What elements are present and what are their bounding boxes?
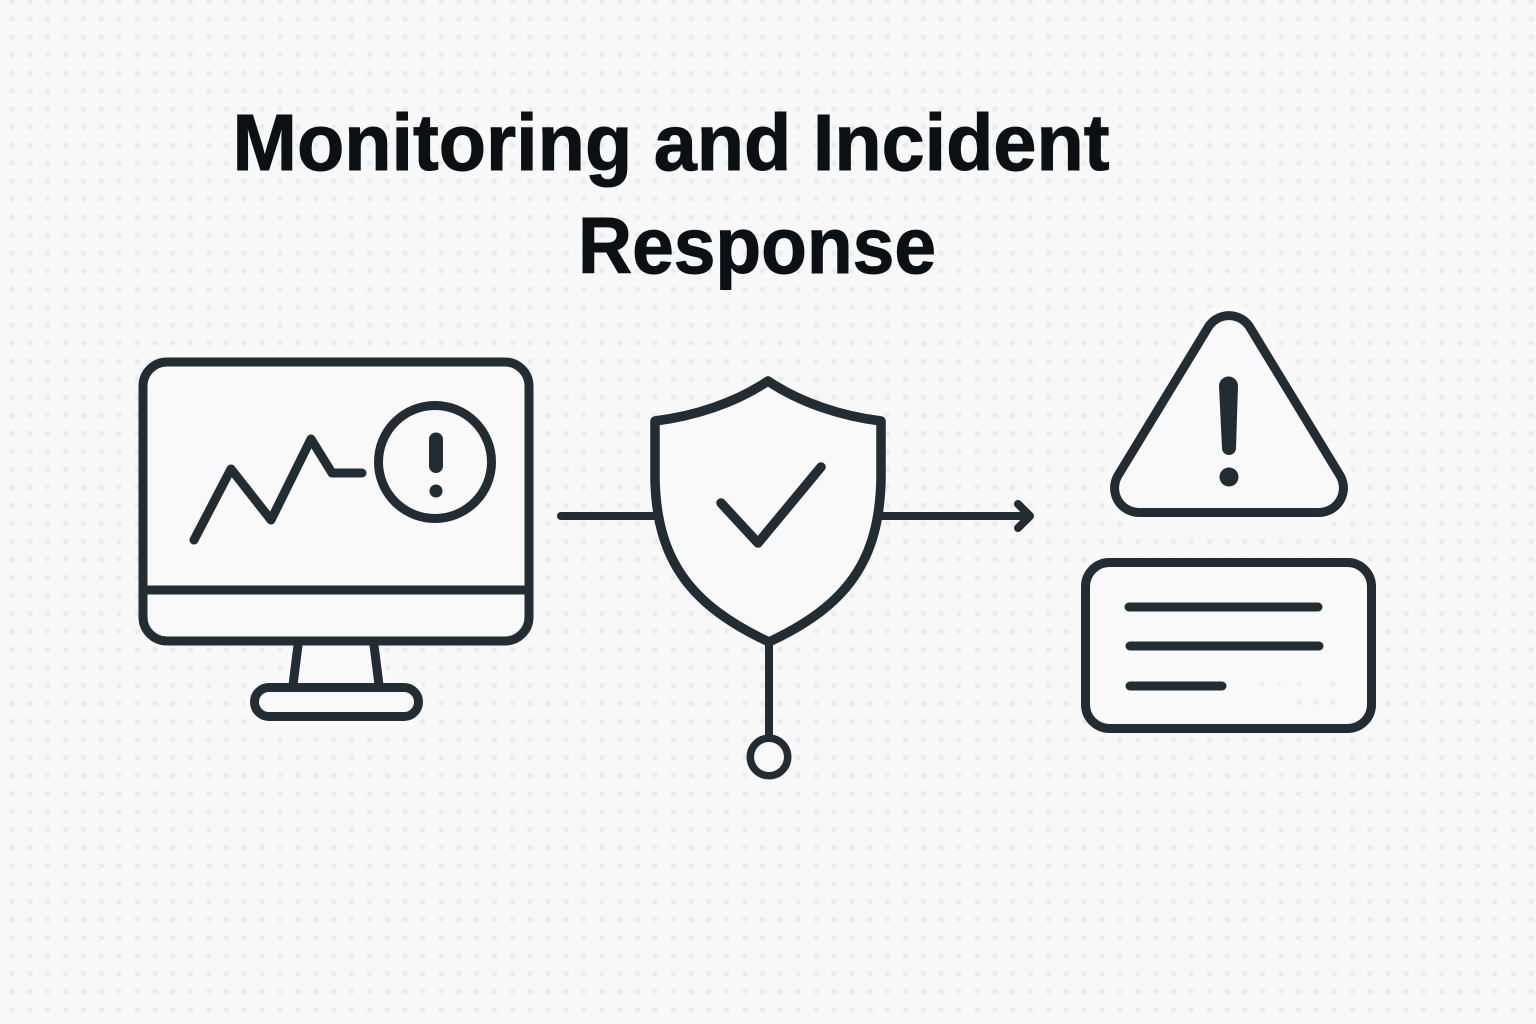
icon: shield with check: [655, 381, 881, 642]
check mark: [721, 467, 821, 543]
alert exclamation mark: [430, 440, 442, 498]
title: [232, 98, 1110, 290]
monitor chin divider: [143, 586, 529, 594]
monitor screen frame: [143, 362, 529, 641]
arrow: shield to alert: [878, 504, 1030, 528]
line chart: [194, 439, 362, 540]
arrow: monitor to shield: [561, 512, 660, 520]
triangle outline: [1115, 316, 1343, 512]
title line 1: Monitoring and Incident: [232, 98, 1110, 187]
shield outline: [655, 381, 881, 642]
icon: monitor with chart and alert: [143, 362, 529, 716]
card outline: [1086, 562, 1372, 728]
monitor base: [254, 688, 418, 716]
icon: warning triangle: [1115, 316, 1343, 512]
monitor stand: [293, 645, 379, 685]
connector: shield to node: [765, 642, 773, 738]
panel: report card: [1086, 562, 1372, 728]
icon: node circle: [750, 738, 788, 776]
alert circle: [378, 406, 492, 518]
text lines: [1129, 607, 1319, 686]
title line 2: Response: [578, 201, 936, 290]
warning exclamation mark: [1219, 376, 1238, 486]
